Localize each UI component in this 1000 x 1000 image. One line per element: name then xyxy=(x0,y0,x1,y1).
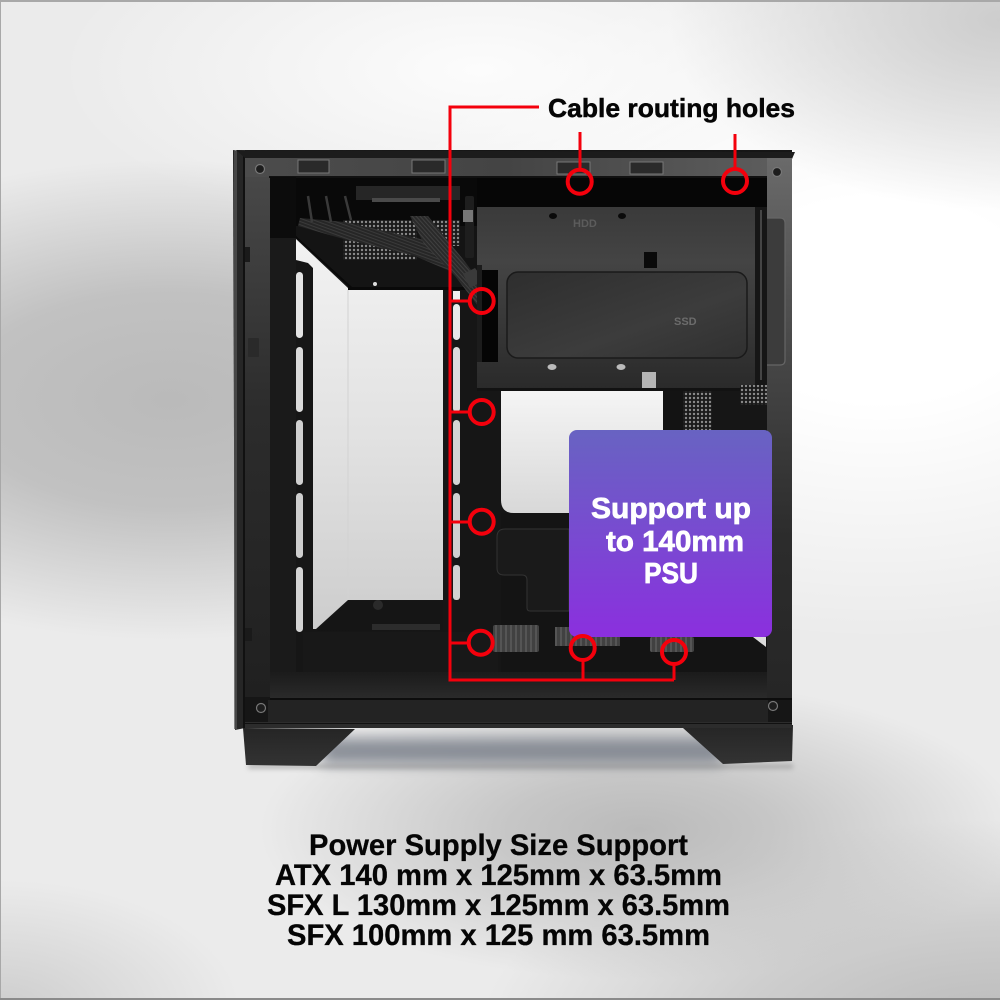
SSD panel xyxy=(507,272,747,358)
callout label: cable routing holes: Cable routing holes xyxy=(548,93,795,123)
top frame clips xyxy=(298,160,663,174)
bottom shelf xyxy=(317,600,443,631)
SSD marking: SSD xyxy=(674,316,697,328)
central pillar and interior xyxy=(270,177,767,700)
drive cage plate xyxy=(477,178,767,391)
left ventilation slots xyxy=(296,272,303,632)
motherboard panel xyxy=(497,529,569,611)
corner screws xyxy=(256,164,782,712)
mounting holes xyxy=(548,213,657,388)
top frame xyxy=(236,150,795,178)
cable cutout slit xyxy=(477,265,498,362)
psu mount pads xyxy=(493,625,694,652)
ribbon cables xyxy=(288,196,488,306)
power supply size support text: ATX 140 mm x 125mm x 63.5mm xyxy=(275,859,722,892)
case feet xyxy=(243,725,793,766)
HDD marking: HDD xyxy=(573,218,597,230)
power supply size support text: SFX 100mm x 125 mm 63.5mm xyxy=(287,919,710,952)
right ventilation slots xyxy=(453,291,460,600)
top shelf with mesh and cables xyxy=(285,178,488,306)
callout text: PSU xyxy=(644,558,698,590)
callout text: to 140mm xyxy=(606,526,744,558)
front glass edge xyxy=(233,150,245,730)
leader bracket xyxy=(450,107,735,680)
right side rail xyxy=(767,218,785,365)
main side window xyxy=(296,239,443,629)
lower right window xyxy=(501,390,663,513)
rear mesh vents xyxy=(663,385,767,431)
floor shadow xyxy=(248,738,793,769)
window seam xyxy=(347,290,349,600)
right frame column xyxy=(767,158,792,700)
case chassis body xyxy=(245,150,792,728)
left column clips xyxy=(245,247,259,641)
purple callout card xyxy=(569,430,772,637)
power supply size support text xyxy=(267,829,730,952)
power supply size support text: SFX L 130mm x 125mm x 63.5mm xyxy=(267,889,730,922)
callout text xyxy=(591,493,751,590)
lower chassis rails xyxy=(245,672,792,728)
left frame column xyxy=(245,177,270,697)
PC case xyxy=(233,150,795,766)
cable hole markers xyxy=(469,169,747,664)
power supply size support text: Power Supply Size Support xyxy=(309,829,688,862)
callout text: Support up xyxy=(591,493,751,525)
triangle gap xyxy=(753,637,766,647)
red annotation lines and circles xyxy=(450,107,747,680)
